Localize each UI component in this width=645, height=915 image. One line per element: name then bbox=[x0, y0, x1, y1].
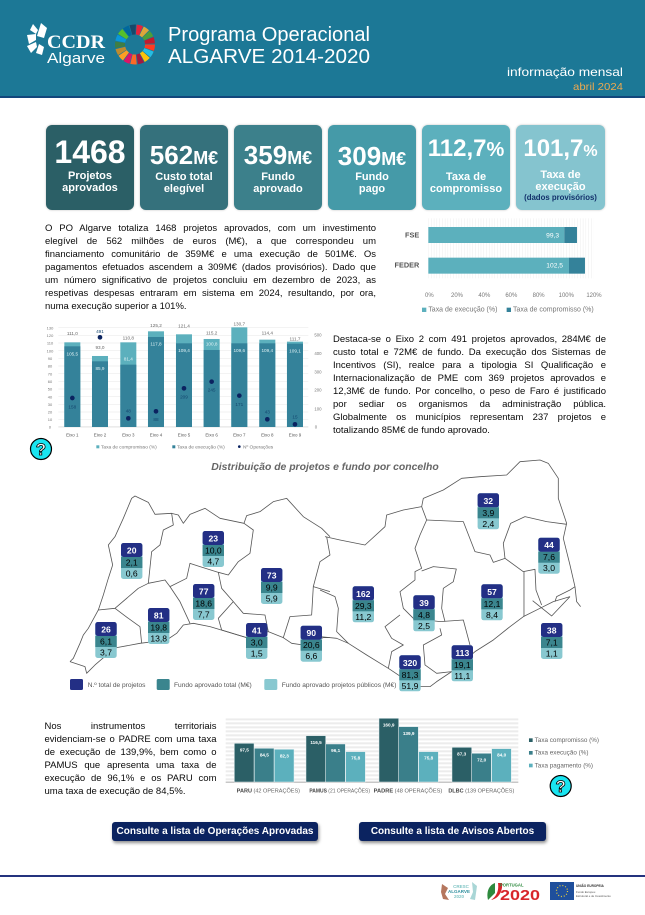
concelho 113: 113 bbox=[455, 648, 469, 658]
chart: taxa por eixo: Nº Operações bbox=[243, 444, 274, 450]
chart: taxa por eixo: 30 bbox=[48, 402, 53, 407]
chart: taxa por eixo: 70 bbox=[48, 371, 53, 376]
chart: taxa por eixo: 130,7 bbox=[233, 321, 246, 326]
chart: FSE and FEDER: FEDER bbox=[394, 261, 420, 270]
concelho 77 bbox=[193, 584, 214, 620]
concelho 20 bbox=[121, 543, 142, 579]
concelho 57: 8,4 bbox=[486, 610, 498, 620]
chart: instrumentos territoriais: 139,9 bbox=[403, 731, 415, 736]
concelho 26 bbox=[95, 622, 117, 658]
text block: instrumentos territoriais: de execução de 139,9%, bem como o bbox=[44, 747, 216, 758]
text block: eixo 2: Destaca-se o Eixo 2 com 491 projetos aprovados, 284M€ de bbox=[333, 334, 606, 345]
KPI card: taxa de execução: execução bbox=[535, 181, 586, 193]
chart: taxa por eixo: 15 bbox=[292, 415, 298, 420]
chart: taxa por eixo: 114,4 bbox=[262, 330, 273, 335]
KPI card: taxa de compromisso: 112,7% bbox=[428, 135, 504, 162]
chart: taxa por eixo: 158 bbox=[68, 404, 77, 409]
concelho 57: 12,1 bbox=[484, 599, 501, 609]
text block: overview: financiamento comunitário de 359M€ e uma execução de 501M€. Os bbox=[45, 249, 376, 260]
concelho 41 bbox=[246, 623, 267, 659]
logo: Portugal 2020: 2020 bbox=[500, 887, 540, 904]
chart: taxa por eixo: 120 bbox=[47, 333, 54, 338]
chart: FSE and FEDER: 120% bbox=[586, 293, 602, 299]
concelho 162: 162 bbox=[356, 589, 371, 599]
concelho 32: 3,9 bbox=[482, 508, 494, 518]
chart: instrumentos territoriais: 75,8 bbox=[424, 756, 434, 761]
chart: FSE and FEDER: Taxa de execução (%) bbox=[428, 307, 497, 314]
text block: overview: numa execução superior a 101%. bbox=[45, 301, 187, 312]
KPI card: fundo pago: pago bbox=[359, 183, 385, 195]
chart: taxa por eixo: 109,1 bbox=[289, 348, 301, 353]
chart: taxa por eixo: Eixo 7 bbox=[233, 432, 246, 437]
concelho 44: 3,0 bbox=[543, 563, 555, 573]
concelho 320 bbox=[399, 655, 421, 691]
concelho 113: 19,1 bbox=[454, 660, 471, 670]
concelho 39: 39 bbox=[419, 598, 429, 608]
chart: taxa por eixo: 88 bbox=[153, 417, 159, 422]
logo: CRESC Algarve 2020 bbox=[441, 882, 477, 900]
chart: instrumentos territoriais: 75,8 bbox=[351, 756, 361, 761]
chart: taxa por eixo: 500 bbox=[314, 333, 322, 338]
concelho 23: 23 bbox=[209, 534, 218, 544]
concelho 73 bbox=[261, 568, 282, 604]
monthly info label bbox=[507, 65, 623, 93]
chart: taxa por eixo: 48 bbox=[126, 408, 131, 413]
chart: taxa por eixo: 121,4 bbox=[178, 324, 190, 329]
text block: instrumentos territoriais bbox=[44, 721, 217, 797]
text block: overview bbox=[45, 223, 376, 312]
icon: help question mark: ? bbox=[36, 440, 46, 459]
KPI card: projetos aprovados: 1468 bbox=[54, 134, 126, 170]
chart: instrumentos territoriais: PADRE (48 OPERAÇÕES) bbox=[374, 787, 442, 794]
chart: instrumentos territoriais: 82,3 bbox=[280, 754, 289, 759]
concelho 73: 9,9 bbox=[266, 582, 278, 592]
concelho 90 bbox=[301, 626, 322, 662]
concelho 38: 1,1 bbox=[546, 648, 558, 658]
concelho 20: 2,1 bbox=[126, 558, 138, 568]
chart: taxa por eixo: 80 bbox=[48, 364, 53, 369]
text block: eixo 2: Internacionalização de PME com 369 projetos aprovados e bbox=[333, 373, 606, 384]
concelho 26: 3,7 bbox=[100, 648, 112, 658]
header banner bbox=[0, 0, 645, 98]
concelho 38 bbox=[541, 623, 562, 659]
text block: eixo 2: Incentivos (SI), realce para a tipologia SI Qualificação e bbox=[333, 360, 606, 371]
chart: instrumentos territoriais: PAMUS (21 OPERAÇÕES) bbox=[309, 787, 370, 794]
icon: CCDR star bbox=[27, 23, 47, 55]
map legend bbox=[70, 679, 396, 690]
text block: eixo 2: custo total e 72M€ de fundo. Da execução dos Sistemas de bbox=[333, 347, 606, 358]
concelho 57 bbox=[481, 584, 503, 620]
chart: instrumentos territoriais: Taxa execução (%) bbox=[535, 750, 588, 757]
monthly info label: abril 2024 bbox=[573, 81, 623, 93]
concelho 113: 11,1 bbox=[454, 671, 471, 681]
text block: overview: O PO Algarve totaliza 1468 projetos aprovados, com um investimento bbox=[45, 223, 376, 234]
chart: taxa por eixo: 125,2 bbox=[150, 323, 162, 328]
KPI card: taxa de execução bbox=[516, 125, 605, 210]
chart: instrumentos territoriais: 97,5 bbox=[240, 748, 249, 753]
chart: instrumentos territoriais: DLBC (139 OPERAÇÕES) bbox=[448, 787, 514, 794]
chart: taxa por eixo: Eixo 6 bbox=[205, 432, 218, 437]
KPI card: taxa de execução: Taxa de bbox=[540, 169, 581, 181]
map legend: Fundo aprovado projetos públicos (M€) bbox=[282, 682, 396, 689]
concelho 23: 4,7 bbox=[207, 556, 219, 566]
logo: CRESC Algarve 2020: ALGARVE bbox=[448, 889, 470, 894]
concelho 81: 13,8 bbox=[150, 634, 167, 644]
header logos and title bbox=[27, 23, 623, 93]
KPI card: taxa de execução: 101,7% bbox=[523, 135, 598, 162]
chart: taxa por eixo: 0 bbox=[49, 425, 52, 430]
chart: FSE and FEDER: 0% bbox=[425, 293, 434, 299]
logo: União Europeia: UNIÃO EUROPEIA bbox=[576, 883, 605, 888]
chart: taxa por eixo: 110,8 bbox=[123, 336, 134, 341]
concelho 57: 57 bbox=[487, 587, 497, 597]
chart: taxa por eixo: Eixo 1 bbox=[66, 432, 79, 437]
logo: CRESC Algarve 2020: 2020 bbox=[454, 894, 465, 899]
chart: FSE and FEDER: 60% bbox=[505, 293, 518, 299]
chart: taxa por eixo: 109,4 bbox=[261, 348, 274, 353]
concelho 23: 10,0 bbox=[205, 546, 222, 556]
concelho 41: 41 bbox=[252, 626, 262, 636]
concelho 26: 6,1 bbox=[100, 636, 112, 646]
concelho 32: 32 bbox=[484, 496, 493, 506]
chart: taxa por eixo: 85,9 bbox=[95, 366, 105, 371]
concelho 44: 44 bbox=[544, 540, 554, 550]
chart: FSE and FEDER: 40% bbox=[478, 293, 491, 299]
chart: taxa por eixo: Eixo 9 bbox=[289, 432, 302, 437]
chart: taxa por eixo: 130 bbox=[47, 325, 54, 330]
text block: eixo 2 bbox=[333, 334, 606, 436]
KPI card: projetos aprovados bbox=[46, 125, 134, 210]
monthly info label: informação mensal bbox=[507, 65, 623, 79]
CCDR Algarve wordmark bbox=[47, 32, 105, 67]
KPI card: custo total: Custo total bbox=[155, 171, 213, 183]
title: ALGARVE 2014-2020 bbox=[168, 46, 370, 68]
concelho 39 bbox=[413, 595, 435, 631]
concelho 20: 20 bbox=[127, 546, 137, 556]
chart: FSE and FEDER: 100% bbox=[559, 293, 575, 299]
chart: taxa por eixo: 105,5 bbox=[66, 351, 79, 356]
concelho 23 bbox=[203, 531, 224, 567]
KPI card: custo total: elegível bbox=[164, 183, 204, 195]
chart: instrumentos territoriais: 72,0 bbox=[477, 757, 487, 762]
chart: instrumentos territoriais: Taxa compromisso (%) bbox=[535, 737, 599, 744]
concelho 320: 81,3 bbox=[402, 670, 419, 680]
KPI card: custo total: 562M€ bbox=[150, 140, 218, 170]
chart: taxa por eixo: Eixo 8 bbox=[261, 432, 274, 437]
button: avisos abertos bbox=[359, 822, 546, 841]
chart: instrumentos territoriais: 96,1 bbox=[331, 748, 341, 753]
chart: instrumentos territoriais: 84,0 bbox=[497, 753, 507, 758]
concelho 90: 90 bbox=[307, 628, 316, 638]
title bbox=[168, 24, 370, 68]
button: avisos abertos: Consulte a lista de Avisos Abertos bbox=[371, 826, 534, 837]
text block: instrumentos territoriais: evidenciam-se o PADRE com uma taxa bbox=[44, 734, 216, 745]
chart: taxa por eixo: 491 bbox=[96, 329, 104, 334]
concelho 39: 4,8 bbox=[418, 610, 430, 620]
logo: União Europeia bbox=[550, 882, 611, 900]
concelho 26: 26 bbox=[101, 624, 111, 634]
CCDR Algarve wordmark: CCDR bbox=[47, 32, 105, 53]
chart: instrumentos territoriais: 116,5 bbox=[310, 740, 322, 745]
chart: taxa por eixo: 300 bbox=[314, 369, 322, 374]
chart: taxa por eixo: 100 bbox=[47, 348, 54, 353]
concelho 77: 18,6 bbox=[195, 598, 212, 608]
KPI card: fundo aprovado: 359M€ bbox=[244, 140, 312, 170]
concelho 77: 7,7 bbox=[198, 610, 210, 620]
KPI card: taxa de compromisso: Taxa de bbox=[446, 171, 486, 183]
KPI card: taxa de compromisso bbox=[422, 125, 510, 210]
logo: União Europeia: Fundo Europeu bbox=[576, 890, 596, 894]
map heading: Distribuição de projetos e fundo por concelho bbox=[211, 462, 439, 473]
chart: taxa por eixo: 100,8 bbox=[206, 342, 218, 347]
concelho 38: 7,1 bbox=[546, 638, 558, 648]
chart: taxa por eixo: 81,4 bbox=[124, 356, 133, 361]
chart: taxa por eixo: 43 bbox=[265, 410, 270, 415]
chart: taxa por eixo: 115,2 bbox=[206, 330, 218, 335]
concelho 320: 320 bbox=[403, 658, 417, 668]
logo: União Europeia: Estrutural e de Investimento bbox=[576, 894, 611, 898]
icon: SDG colour ring bbox=[114, 23, 156, 66]
text block: eixo 2: 12,3M€ de fundo. Por concelho, o peso de Faro é justificado bbox=[333, 386, 606, 397]
KPI card: custo total bbox=[140, 125, 228, 210]
title: Programa Operacional bbox=[168, 24, 370, 46]
text block: instrumentos territoriais: PAMUS que apresenta uma taxa de bbox=[44, 760, 216, 771]
chart: taxa por eixo: Taxa de execução (%) bbox=[177, 444, 225, 450]
KPI card: projetos aprovados: Projetos bbox=[68, 170, 112, 182]
concelho 81 bbox=[148, 608, 169, 644]
concelho 90: 6,6 bbox=[305, 651, 317, 661]
concelho 32: 2,4 bbox=[482, 519, 494, 529]
chart: taxa por eixo: Taxa de compromisso (%) bbox=[101, 444, 157, 450]
concelho 77: 77 bbox=[199, 586, 209, 596]
concelho 113 bbox=[452, 645, 473, 681]
map legend: N.º total de projetos bbox=[88, 682, 146, 689]
KPI card: fundo pago bbox=[328, 125, 416, 210]
KPI card: taxa de compromisso: compromisso bbox=[430, 183, 502, 195]
concelho 162: 11,2 bbox=[355, 612, 372, 622]
text block: eixo 2: por sediar os organismos da administração pública. bbox=[333, 399, 606, 410]
chart: taxa por eixo: Eixo 2 bbox=[94, 432, 107, 437]
chart: taxa por eixo: 109,4 bbox=[178, 348, 190, 353]
chart: taxa por eixo: 200 bbox=[314, 388, 322, 393]
KPI card: projetos aprovados: aprovados bbox=[62, 182, 118, 194]
concelho 20: 0,6 bbox=[126, 568, 138, 578]
chart: FSE and FEDER: 99,3 bbox=[546, 232, 559, 239]
KPI card: taxa de execução: (dados provisórios) bbox=[524, 193, 597, 202]
chart: instrumentos territoriais: 87,3 bbox=[457, 751, 467, 756]
chart: FSE and FEDER: Taxa de compromisso (%) bbox=[513, 307, 594, 314]
chart: taxa por eixo: 111,7 bbox=[289, 337, 301, 342]
chart: taxa por eixo: 100 bbox=[314, 406, 322, 411]
CCDR Algarve wordmark: Algarve bbox=[47, 50, 105, 67]
footer rule bbox=[0, 875, 645, 877]
button: operações aprovadas bbox=[112, 822, 318, 841]
text block: instrumentos territoriais: Nos instrumentos territoriais bbox=[44, 721, 216, 732]
chart: taxa por eixo: 40 bbox=[48, 394, 53, 399]
concelho 41: 1,5 bbox=[251, 648, 263, 658]
concelho 39: 2,5 bbox=[418, 621, 430, 631]
chart: instrumentos territoriais: PARU (42 OPERAÇÕES) bbox=[237, 787, 300, 794]
concelho 44: 7,6 bbox=[543, 552, 555, 562]
chart: instrumentos territoriais: 84,5 bbox=[260, 753, 269, 758]
chart: instrumentos territoriais: Taxa pagamento (%) bbox=[535, 762, 593, 769]
chart: FSE and FEDER: 20% bbox=[451, 293, 464, 299]
text block: instrumentos territoriais: uma taxa de execução de 84,5%. bbox=[44, 786, 186, 797]
chart: taxa por eixo: 20 bbox=[48, 410, 53, 415]
chart: taxa por eixo: Eixo 4 bbox=[150, 432, 163, 437]
chart: taxa por eixo: 60 bbox=[48, 379, 53, 384]
text block: overview: respetivas despesas entraram em sistema em 2024, resultando, por ora, bbox=[45, 288, 376, 299]
text block: overview: um número significativo de projetos concluiu em dezembro de 2023, as bbox=[45, 275, 376, 286]
text block: eixo 2: totalizando 85M€ de fundo aprovado. bbox=[333, 425, 490, 436]
chart: taxa por eixo: 111,0 bbox=[67, 331, 78, 336]
icon: help question mark: ? bbox=[556, 777, 566, 796]
concelho 81: 19,8 bbox=[150, 622, 167, 632]
chart: taxa por eixo: 117,8 bbox=[150, 342, 162, 347]
text block: overview: pagamentos efetuados ascendem a 309M€ (dados provisórios). Dado que bbox=[45, 262, 376, 273]
chart: taxa por eixo: 109,6 bbox=[233, 348, 246, 353]
KPI card: fundo pago: Fundo bbox=[355, 171, 389, 183]
concelho 90: 20,6 bbox=[303, 640, 320, 650]
chart: taxa por eixo: Eixo 3 bbox=[122, 432, 135, 437]
chart: taxa por eixo: 10 bbox=[48, 417, 53, 422]
concelho 73: 73 bbox=[267, 570, 277, 580]
text block: overview: elegível de 562 milhões de euros (M€), a que correspondeu um bbox=[45, 236, 376, 247]
concelho 73: 5,9 bbox=[266, 594, 278, 604]
chart: taxa por eixo: 171 bbox=[235, 402, 244, 407]
logo: Portugal 2020 bbox=[487, 882, 540, 904]
concelho 44 bbox=[538, 538, 560, 574]
KPI card: fundo pago: 309M€ bbox=[338, 141, 406, 171]
concelho 162: 29,3 bbox=[355, 601, 372, 611]
chart: taxa por eixo: 50 bbox=[48, 387, 53, 392]
logo: Portugal 2020: PORTUGAL bbox=[500, 882, 524, 888]
chart: taxa por eixo: 110 bbox=[47, 341, 54, 346]
concelho 162 bbox=[353, 586, 374, 622]
button: operações aprovadas: Consulte a lista de Operações Aprovadas bbox=[117, 826, 313, 837]
concelho 41: 3,0 bbox=[251, 638, 263, 648]
KPI card: fundo aprovado: Fundo bbox=[261, 171, 295, 183]
logo: CRESC Algarve 2020: CRESC bbox=[453, 884, 470, 889]
chart: taxa por eixo: 0 bbox=[315, 425, 318, 430]
chart: taxa por eixo: 245 bbox=[208, 388, 216, 393]
concelho 38: 38 bbox=[547, 626, 557, 636]
concelho 320: 51,9 bbox=[402, 681, 419, 691]
KPI card: fundo aprovado bbox=[234, 125, 322, 210]
chart: instrumentos territoriais: 160,9 bbox=[383, 723, 395, 728]
map legend: Fundo aprovado total (M€) bbox=[174, 682, 252, 689]
chart: taxa por eixo: 209 bbox=[180, 395, 188, 400]
chart: FSE and FEDER: 80% bbox=[533, 293, 545, 299]
concelho 32 bbox=[478, 493, 499, 529]
chart: taxa por eixo: 93,0 bbox=[95, 345, 105, 350]
chart: taxa por eixo: 400 bbox=[314, 351, 322, 356]
chart: taxa por eixo: Eixo 5 bbox=[178, 432, 191, 437]
KPI card: fundo aprovado: aprovado bbox=[253, 183, 303, 195]
concelho 81: 81 bbox=[154, 610, 164, 620]
text block: instrumentos territoriais: execução de 96,1% e os PARU com bbox=[44, 773, 216, 784]
chart: taxa por eixo: 90 bbox=[48, 356, 53, 361]
text block: eixo 2: Globalmente os municípios representam 237 projetos e bbox=[333, 412, 606, 423]
chart: FSE and FEDER: 102,5 bbox=[546, 263, 563, 270]
chart: FSE and FEDER: FSE bbox=[405, 230, 419, 239]
